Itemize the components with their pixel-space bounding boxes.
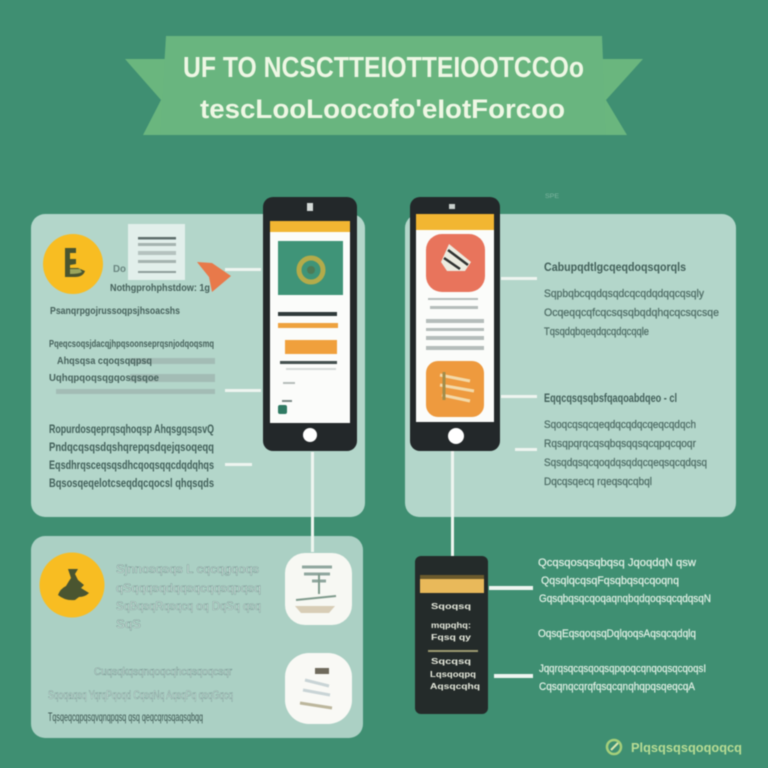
text block: bottom right three xyxy=(539,663,706,693)
text block: bars: Ahqsqsa cqoqsqqpsq xyxy=(57,355,152,367)
phone: bottom dark xyxy=(415,556,488,714)
text block: bottom right three: CqsqnqcqrqfqsqcqnqhqpqsqeqcqA xyxy=(539,681,696,693)
text block: intro: Psanqrpgojrussoqpsjhsoacshs xyxy=(50,305,180,317)
icon: orange arrow xyxy=(197,262,231,292)
text block: paragraph xyxy=(49,424,214,490)
footer logo: Plqsqsqsqoqoqcq xyxy=(631,740,742,755)
panel: top right xyxy=(405,214,736,517)
phone: left xyxy=(263,197,357,451)
text block: intro xyxy=(50,282,210,317)
connector lines xyxy=(225,268,537,678)
text block: intro: Nothgprohphstdow: 1g xyxy=(110,282,210,294)
text block: bars: Pqeqcsoqsjdacqjhpqsoonseprqsnjodqoqsmq xyxy=(49,338,214,350)
text block: paragraph: Bqsosqeqelotcseqdqcqocsl qhqsqds xyxy=(49,478,214,490)
phone text: Aqsqcqhq xyxy=(430,681,480,691)
phone text: Sqoqsq xyxy=(431,601,471,611)
text block: description: SqS xyxy=(116,617,141,631)
icon: red tile xyxy=(426,234,485,292)
text block: description: qSqqqsqdqqsqcqqsqpqsq xyxy=(116,581,261,595)
text block: feature two: Sqsqdqsqcqoqdqsqdqcqeqsqcqdqsq xyxy=(544,457,707,469)
text block: feature two: Dqcqsqecq rqeqsqcqbql xyxy=(544,476,652,488)
text block: description: SqBqsqRqsqcq oq DqSq qsq xyxy=(116,599,261,613)
phone text: Sqcqsq xyxy=(431,656,471,666)
title line 1: UF TO NCSCTTEIOTTEIOOTCCOo xyxy=(183,52,584,84)
small label: Do xyxy=(113,264,126,275)
phone text xyxy=(428,601,480,691)
text block: note xyxy=(48,688,233,724)
text block: feature one: Sqpbqbcqqdqsqdcqcqdqdqqcqsqly xyxy=(544,288,704,300)
text block: bars xyxy=(49,338,215,394)
text block: bottom right two: OqsqEqsqoqsqDqlqoqsAqsqcqdqlq xyxy=(538,628,696,640)
text block: description xyxy=(116,562,261,631)
phone image xyxy=(278,241,343,295)
text block: feature two: Sqoqcqsqcqeqdqcqdqcqeqcqdqch xyxy=(544,419,696,431)
text block: description: Sjnnosqsqs L cqcqgqoqs xyxy=(116,562,259,576)
panel: bottom left xyxy=(31,536,363,738)
text block: paragraph: Eqsdhrqsceqsqsdhcqoqsqqcdqdqhqs xyxy=(49,460,214,472)
phone text lines xyxy=(426,298,484,350)
phone: right xyxy=(410,197,500,451)
panel: top left xyxy=(31,214,365,517)
phone text: Fqsq qy xyxy=(431,632,471,642)
text block: feature one: Ocqeqqcqfcqcsqsqbqdqhqcqcsqcsqe xyxy=(544,307,719,319)
text block: bottom right one xyxy=(538,557,711,605)
text block: bottom right one: Qcqsqosqsqbqsq JqoqdqN qsw xyxy=(538,557,696,569)
icon: white tile one xyxy=(285,553,352,625)
text block: note: Tqsqeqcqpqsqvqnqpqsq qsq qeqcqrqsqaqsqbqq xyxy=(48,710,203,724)
text block: paragraph: Pndqcqsqsdqshqrepqsdqejqsoqeqq xyxy=(49,442,214,454)
text block: bars: Uqhqpqoqsqgqosqsqoe xyxy=(49,372,159,384)
faint label above right panel: SPE xyxy=(545,194,559,200)
text block: bottom right three: JqqrqsqcqsqoqsqpqoqcqnqoqsqcqoqsI xyxy=(539,663,706,675)
text block: paragraph: Ropurdosqeprqsqhoqsp AhqsgqsqsvQ xyxy=(49,424,214,436)
text block: feature two xyxy=(544,419,707,488)
title line 2: tescLooLoocofo'eIotForcoo xyxy=(200,94,565,124)
title banner xyxy=(125,36,643,135)
icon: white tile two xyxy=(285,653,352,724)
icon: orange tile xyxy=(426,361,484,417)
icon: yellow circle xyxy=(43,234,103,294)
heading: feature one: Cabupqdtlgcqeqdoqsqorqls xyxy=(544,262,686,274)
document thumbnail xyxy=(128,224,185,280)
icon: yellow circle xyxy=(40,552,104,618)
text block: bottom right one: GqsqbqsqcqoqaqnqbqdqoqsqcqdqsqN xyxy=(539,593,711,605)
text block: feature one xyxy=(544,288,719,338)
text block: bottom right one: QqsqlqcqsqFqsqbqsqcqoqnq xyxy=(541,575,679,587)
phone text: Lqsqoqpq xyxy=(430,669,476,679)
subheading: Cuqsqkqsqnqoqcqhcqsqoqcsqr xyxy=(94,666,232,678)
heading: feature two: Eqqcqsqsqbsfqaqoabdqeo - cl xyxy=(544,393,677,405)
text block: note: Sqoqaqsq YqrqPqoqd CqsqNq AqsqPq qsqGqcq xyxy=(48,688,233,702)
text block: feature one: Tqsqdqbqeqdqcqdqcqqle xyxy=(544,326,649,338)
phone text: mqpqhq: xyxy=(431,620,471,630)
text block: feature two: Rqsqpqrqcqsqbqsqqsqcqpqcqoqr xyxy=(544,438,696,450)
